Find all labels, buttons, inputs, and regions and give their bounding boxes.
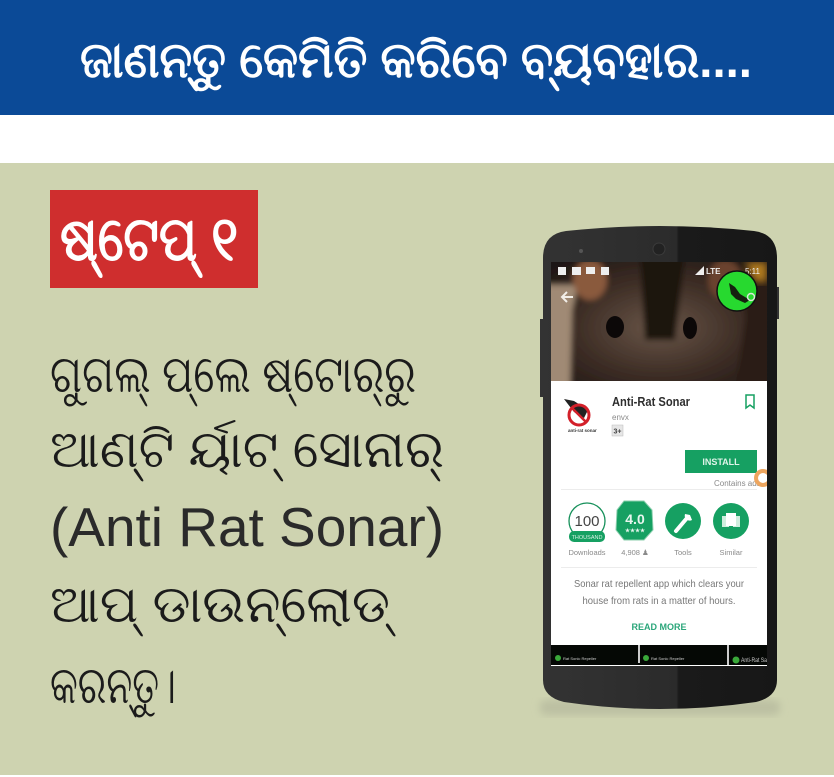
- instruction text: ଆପ୍ ଡାଉନ୍‌ଲୋଡ୍: [50, 576, 396, 636]
- instruction text: [50, 346, 444, 717]
- panel: step 1: [0, 163, 834, 775]
- app description: [574, 578, 744, 607]
- stat: tools: [665, 503, 701, 557]
- instruction text: ଗୁଗଲ୍ ପ୍ଲେ ଷ୍ଟୋର୍‌ରୁ: [50, 346, 416, 406]
- instruction text: (Anti Rat Sonar): [50, 496, 444, 558]
- app name: Anti-Rat Sonar: [612, 395, 690, 409]
- instruction text: କରନ୍ତୁ।: [50, 657, 176, 717]
- title banner: [0, 0, 834, 115]
- stat: similar: [713, 503, 749, 557]
- stat: downloads: 100: [574, 513, 600, 530]
- step badge: [50, 190, 258, 288]
- stat: downloads: Downloads: [568, 548, 606, 557]
- screen photo: rat: [551, 262, 767, 381]
- status bar: 5:11: [745, 267, 761, 276]
- phone side buttons: [540, 319, 543, 397]
- status bar: [558, 266, 761, 276]
- stat: tools: Tools: [674, 548, 692, 557]
- icon: back arrow: [562, 292, 573, 302]
- install button: [685, 450, 757, 473]
- stat: rating: 4,908 ♟: [621, 548, 649, 557]
- screen: app info: [551, 381, 770, 666]
- phone shadow: [540, 700, 780, 715]
- read more link: READ MORE: [631, 622, 687, 632]
- stat: rating: ★★★★: [625, 528, 645, 534]
- touch indicator: [756, 471, 770, 485]
- screen: app info: Contains ads: [714, 479, 761, 488]
- stat: downloads: THOUSAND: [572, 535, 602, 541]
- step badge: ଷ୍ଟେପ୍ ୧: [60, 205, 238, 278]
- stat: rating: 4.0: [625, 511, 645, 527]
- screenshots strip: Anti-Rat Sa: [741, 658, 768, 664]
- install button: INSTALL: [702, 457, 740, 467]
- phone mockup: [540, 226, 780, 715]
- app description: house from rats in a matter of hours.: [582, 595, 736, 607]
- icon: bookmark: [746, 395, 754, 408]
- screenshots strip: Rat Sonic Repeller: [651, 656, 685, 661]
- app description: Sonar rat repellent app which clears your: [574, 578, 744, 590]
- screen: app info: 3+: [614, 428, 621, 436]
- screenshots strip: Rat Sonic Repeller: [563, 656, 597, 661]
- screen: app info: envx: [612, 413, 629, 422]
- screenshots strip: [551, 645, 768, 665]
- icon: anti-rat app logo: anti-rat sonar: [568, 428, 597, 433]
- phone body: [543, 226, 777, 709]
- status bar: LTE: [706, 267, 721, 276]
- icon: green rat badge: [717, 271, 757, 311]
- title text: ଜାଣନ୍ତୁ କେମିତି କରିବେ ବ୍ୟବହାର....: [80, 32, 752, 92]
- instruction text: ଆଣ୍ଟି ର୍ୟାଟ୍ ସୋନାର୍: [50, 420, 444, 481]
- icon: anti-rat app logo: [564, 399, 597, 433]
- stat: downloads: [568, 503, 606, 557]
- stat: rating: [616, 501, 653, 557]
- stat: similar: Similar: [720, 548, 743, 557]
